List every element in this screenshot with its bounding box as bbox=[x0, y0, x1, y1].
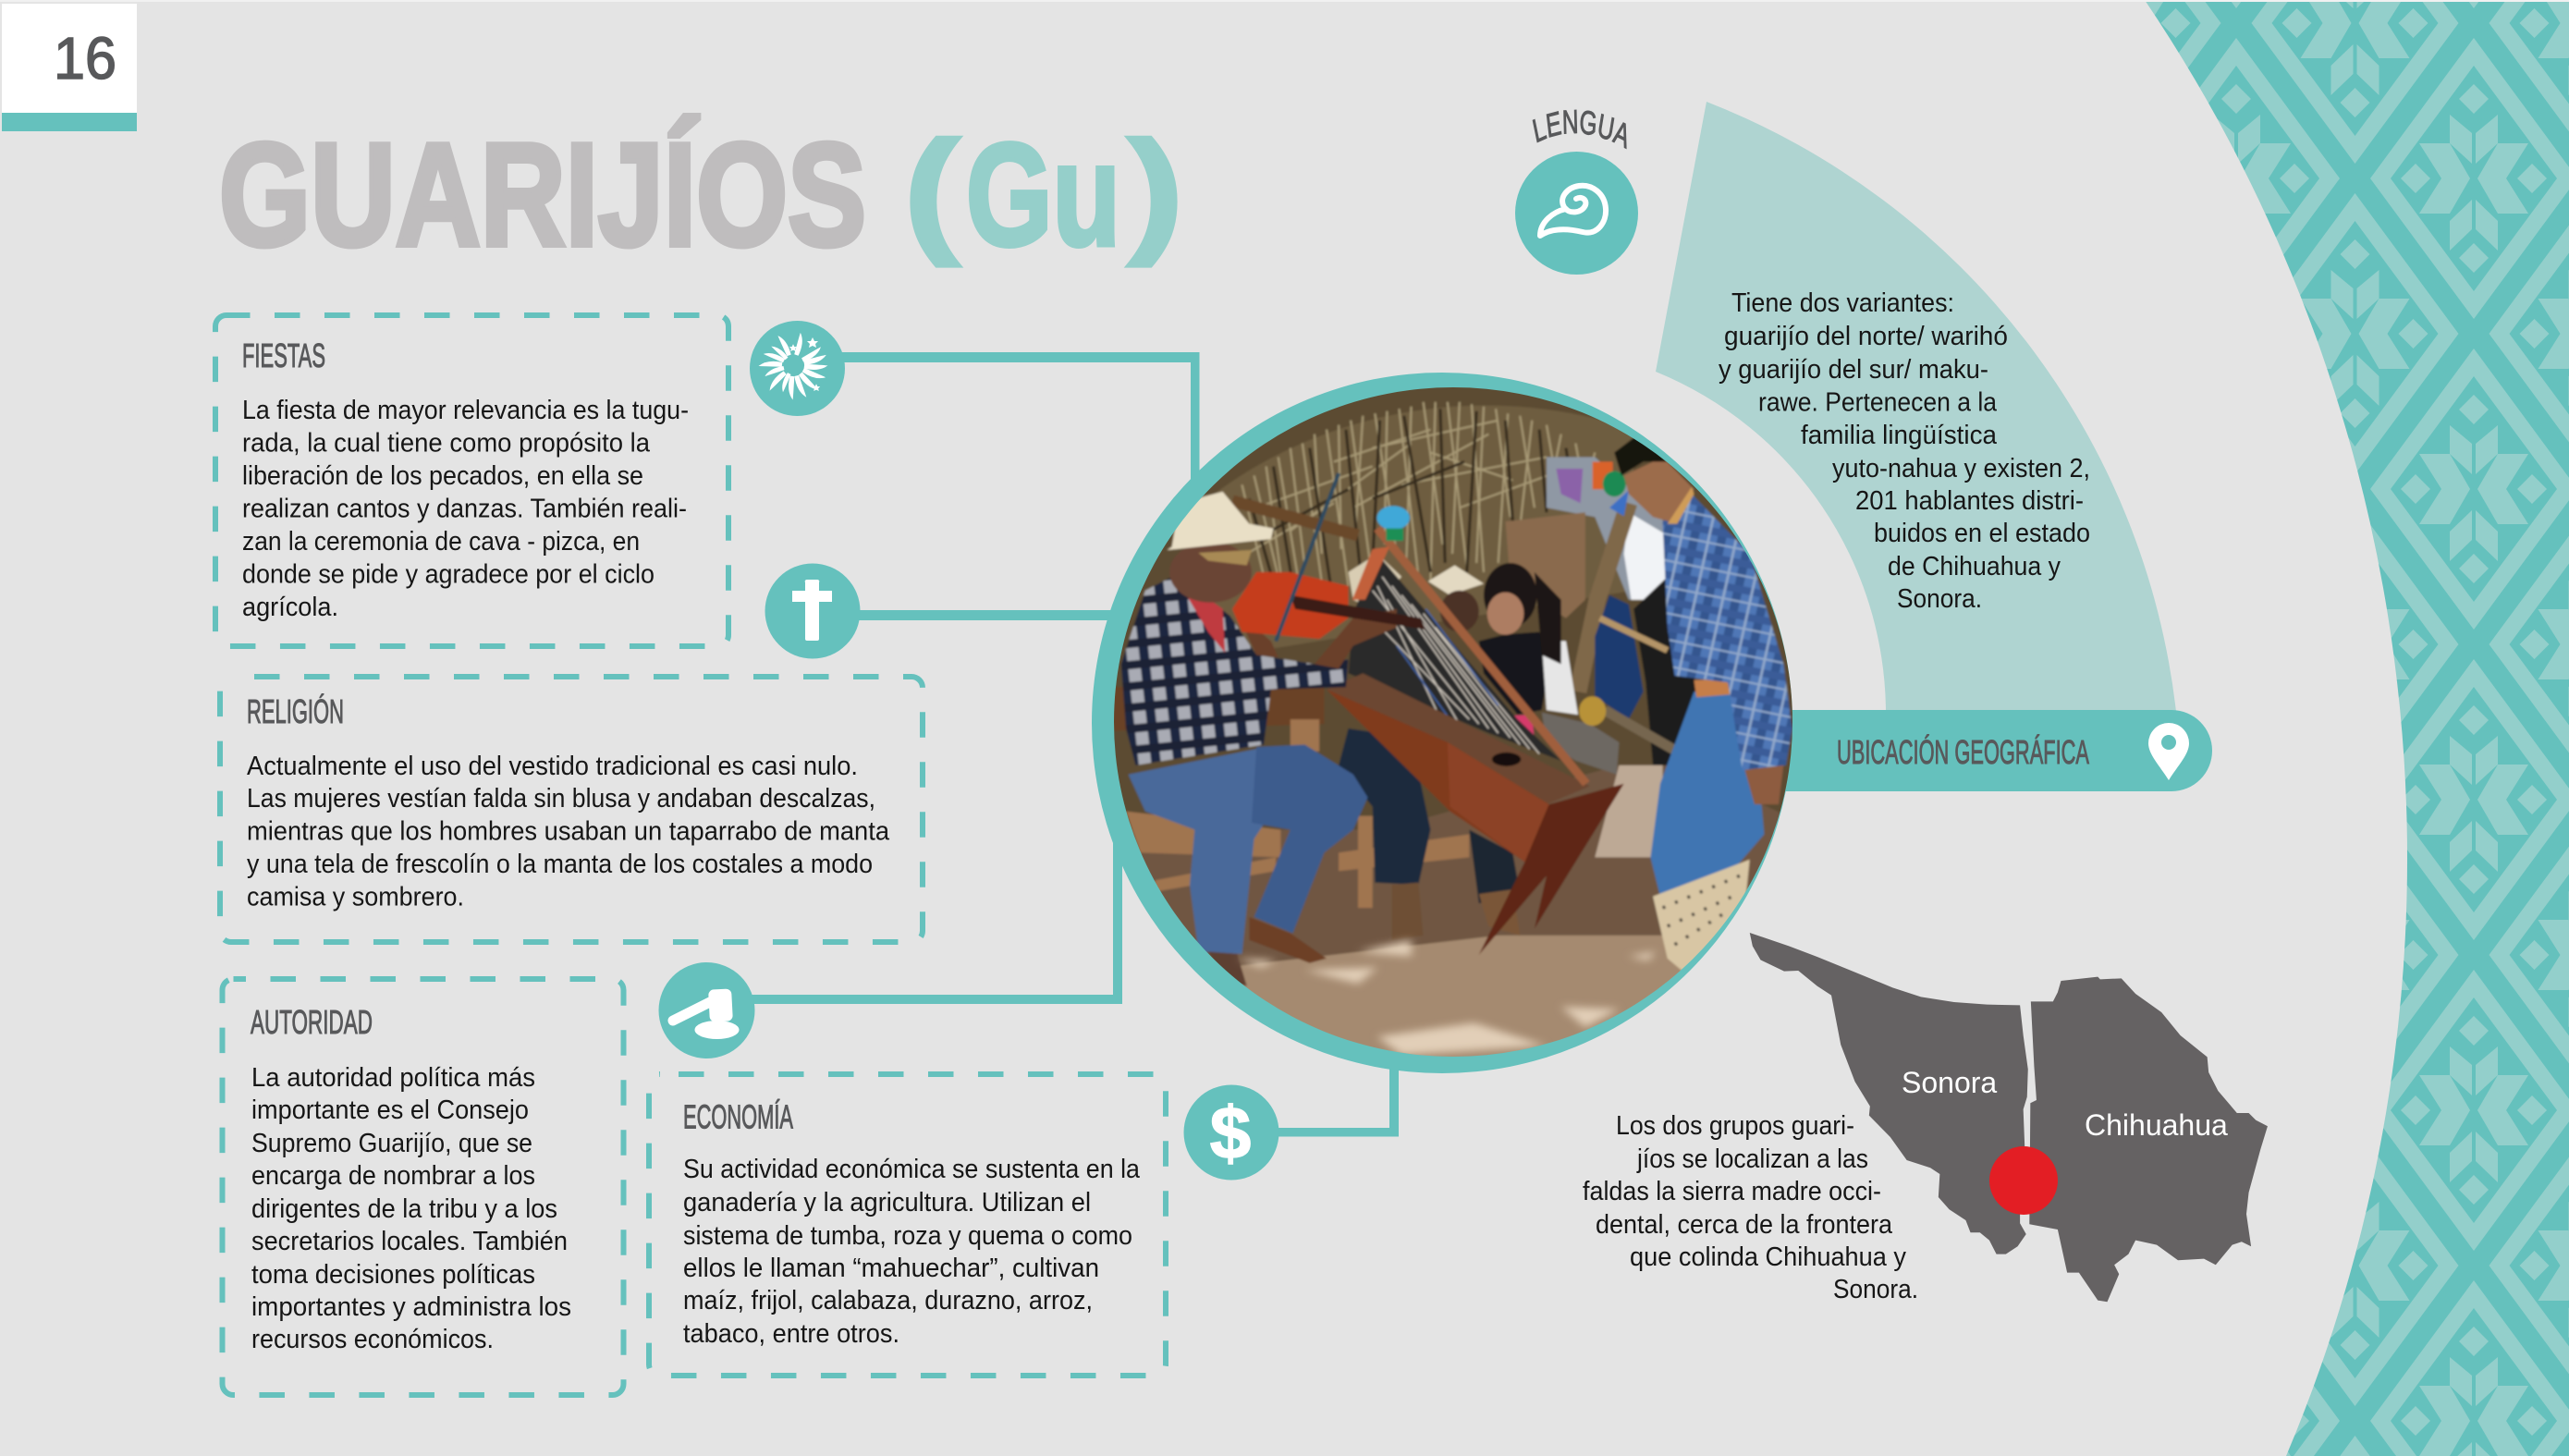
text: fiestas: donde se pide y agradece por el ciclo bbox=[242, 560, 654, 590]
text: fiestas: La fiesta de mayor relevancia es la tugu- bbox=[242, 396, 689, 425]
text: autoridad: recursos económicos. bbox=[251, 1325, 494, 1354]
text: religion: y una tela de frescolín o la manta de los costales a modo bbox=[247, 850, 873, 879]
text: lengua description: de Chihuahua y bbox=[1888, 552, 2061, 581]
text: lengua description: guarijío del norte/ warihó bbox=[1724, 322, 2008, 351]
text: map description bbox=[1583, 1111, 1918, 1304]
text: map description: que colinda Chihuahua y bbox=[1630, 1242, 1907, 1272]
panel: economia bbox=[649, 1074, 1166, 1376]
panel: autoridad bbox=[222, 979, 623, 1395]
icon: location pin bbox=[2148, 723, 2189, 780]
text: fiestas: zan la ceremonia de cava - pizca, en bbox=[242, 527, 640, 557]
marker: guarijío area bbox=[1989, 1146, 2058, 1215]
icon: dollar bbox=[1183, 1085, 1279, 1180]
text: economia: maíz, frijol, calabaza, durazno, arroz, bbox=[683, 1286, 1093, 1315]
text: fiestas: liberación de los pecados, en ella se bbox=[242, 461, 643, 491]
icon: lengua swirl bbox=[1515, 152, 1638, 275]
location pill bbox=[1710, 710, 2212, 791]
text: map description: Sonora. bbox=[1833, 1275, 1918, 1304]
text: lengua description: y guarijío del sur/ maku- bbox=[1719, 355, 1988, 385]
text: map description: faldas la sierra madre occi- bbox=[1583, 1177, 1881, 1206]
text: economia: tabaco, entre otros. bbox=[683, 1319, 899, 1349]
text: autoridad: encarga de nombrar a los bbox=[251, 1161, 535, 1191]
photo: musicians with violin and harp bbox=[1114, 387, 1792, 1057]
text: economia bbox=[683, 1155, 1140, 1349]
icon: dollar: $ bbox=[1210, 1092, 1251, 1174]
label: Sonora: Sonora bbox=[1902, 1066, 1997, 1099]
title: ( bbox=[903, 112, 960, 267]
text: religion: Las mujeres vestían falda sin blusa y andaban descalzas, bbox=[247, 784, 875, 814]
text: map description: dental, cerca de la frontera bbox=[1596, 1210, 1892, 1240]
heading: economia: ECONOMÍA bbox=[683, 1098, 793, 1135]
panel: fiestas bbox=[215, 315, 728, 646]
girl and companions bbox=[1479, 632, 1549, 715]
text: economia: sistema de tumba, roza y quema o como bbox=[683, 1221, 1132, 1251]
text: lengua description bbox=[1719, 288, 2090, 614]
icon: cross bbox=[765, 564, 860, 658]
seated man bbox=[1339, 728, 1430, 885]
text: lengua description: familia lingüística bbox=[1801, 421, 1997, 450]
icon: fireworks bbox=[750, 321, 845, 416]
text: economia: ellos le llaman “mahuechar”, cultivan bbox=[683, 1254, 1099, 1283]
text: religion: mientras que los hombres usaban un taparrabo de manta bbox=[247, 817, 889, 847]
icon: gavel bbox=[658, 962, 754, 1058]
sky and background bbox=[1547, 458, 1672, 600]
text: lengua description: rawe. Pertenecen a la bbox=[1758, 388, 1997, 418]
region: Sonora bbox=[1750, 933, 2028, 1254]
page number tab: 16 bbox=[54, 25, 116, 92]
text: lengua description: Tiene dos variantes: bbox=[1731, 288, 1954, 318]
text: map description: jíos se localizan a las bbox=[1636, 1144, 1868, 1174]
panel: lengua sector bbox=[1656, 102, 2176, 712]
connector lines bbox=[749, 352, 1399, 1137]
text: autoridad: La autoridad política más bbox=[251, 1063, 535, 1093]
text: fiestas bbox=[242, 396, 689, 622]
heading: fiestas: FIESTAS bbox=[242, 336, 325, 374]
title: GUARIJÍOS bbox=[219, 114, 866, 276]
text: lengua description: 201 hablantes distri- bbox=[1855, 486, 2084, 516]
text: religion bbox=[247, 752, 889, 912]
harp strings bbox=[1349, 554, 1561, 761]
map: Sonora and Chihuahua bbox=[1750, 933, 2268, 1302]
text: lengua description: buidos en el estado bbox=[1874, 519, 2090, 548]
heading: ubicacion geografica: UBICACIÓN GEOGRÁFICA bbox=[1837, 733, 2089, 771]
text: map description: Los dos grupos guari- bbox=[1616, 1111, 1854, 1141]
title: ) bbox=[1127, 112, 1184, 267]
woven pattern background bbox=[2117, 0, 2569, 1456]
bench bbox=[1114, 682, 1324, 731]
heading: religion: RELIGIÓN bbox=[247, 692, 344, 730]
page number tab bbox=[2, 4, 137, 131]
text: autoridad bbox=[251, 1063, 571, 1354]
dancing man bbox=[1650, 691, 1764, 897]
text: autoridad: toma decisiones políticas bbox=[251, 1260, 535, 1290]
text: fiestas: agrícola. bbox=[242, 593, 338, 622]
text: lengua description: yuto-nahua y existen 2, bbox=[1832, 454, 2090, 483]
text: economia: Su actividad económica se sustenta en la bbox=[683, 1155, 1140, 1184]
heading: autoridad: AUTORIDAD bbox=[251, 1003, 373, 1041]
man with violin bbox=[1121, 574, 1349, 765]
title: Gu bbox=[966, 114, 1120, 276]
ground bbox=[1135, 764, 1780, 965]
harp body bbox=[1327, 673, 1590, 804]
text: autoridad: importantes y administra los bbox=[251, 1292, 571, 1322]
panel: religion bbox=[220, 677, 923, 942]
text: fiestas: realizan cantos y danzas. También reali- bbox=[242, 494, 687, 523]
text: autoridad: dirigentes de la tribu y a los bbox=[251, 1194, 557, 1224]
text: religion: Actualmente el uso del vestido tradicional es casi nulo. bbox=[247, 752, 858, 781]
text: autoridad: secretarios locales. También bbox=[251, 1227, 568, 1256]
text: fiestas: rada, la cual tiene como propósito la bbox=[242, 429, 650, 459]
sun patches on the ground bbox=[1237, 940, 1656, 1055]
text: economia: ganadería y la agricultura. Utilizan el bbox=[683, 1188, 1091, 1217]
heading: lengua: LENGUA bbox=[1533, 109, 1627, 150]
text: autoridad: importante es el Consejo bbox=[251, 1095, 529, 1125]
text: autoridad: Supremo Guarijío, que se bbox=[251, 1129, 532, 1158]
text: lengua description: Sonora. bbox=[1897, 584, 1982, 614]
region: Chihuahua bbox=[2029, 977, 2268, 1302]
photo ring bbox=[1092, 373, 1792, 1073]
label: Chihuahua: Chihuahua bbox=[2085, 1108, 2228, 1142]
text: religion: camisa y sombrero. bbox=[247, 882, 464, 912]
